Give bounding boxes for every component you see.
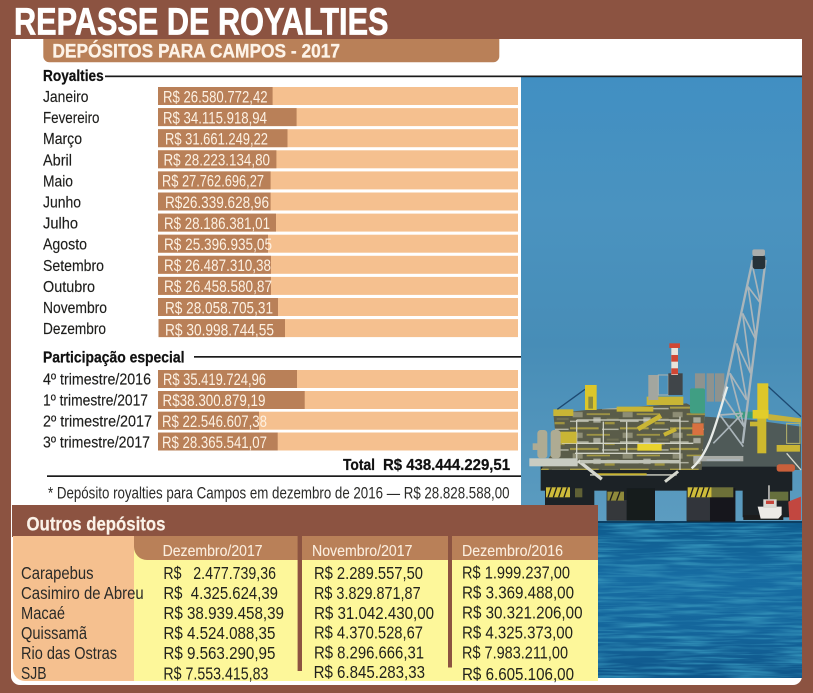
row: 1o trimestre 2017 bbox=[43, 391, 518, 410]
values: dezembro 2017: R$ 4.524.088,35 bbox=[163, 623, 275, 643]
row: maio: R$ 27.762.696,27 bbox=[162, 173, 264, 191]
title: REPASSE DE ROYALTIES bbox=[14, 1, 388, 43]
row: janeiro bbox=[43, 87, 518, 106]
row: 3o trimestre 2017: R$ 28.365.541,07 bbox=[162, 434, 267, 452]
heading: royalties: Royalties bbox=[43, 68, 104, 85]
row: setembro bbox=[43, 256, 518, 275]
row: 1o trimestre 2017: 1º trimestre/2017 bbox=[43, 392, 148, 410]
row: julho: Julho bbox=[43, 216, 78, 233]
row: abril bbox=[43, 150, 518, 170]
values: dezembro 2016: R$ 30.321.206,00 bbox=[462, 603, 583, 623]
row: agosto: Agosto bbox=[43, 237, 87, 254]
row: dezembro bbox=[43, 319, 518, 340]
municipality labels bbox=[21, 563, 144, 683]
total: Total bbox=[343, 457, 375, 474]
row: outubro: Outubro bbox=[43, 279, 95, 296]
row: agosto: R$ 25.396.935,05 bbox=[164, 236, 272, 254]
panel: outros depositos bbox=[12, 505, 598, 684]
column header band bbox=[134, 536, 598, 560]
topside modules bbox=[541, 403, 705, 470]
yellow block bbox=[637, 444, 662, 451]
values: dezembro 2017: R$ 4.325.624,39 bbox=[163, 583, 278, 603]
municipality labels: Quissamã bbox=[21, 623, 87, 643]
hazard stripes bbox=[546, 487, 788, 501]
deck and white braces bbox=[529, 456, 743, 483]
row: 3o trimestre 2017: 3º trimestre/2017 bbox=[43, 434, 150, 452]
values: novembro 2017: R$ 6.845.283,33 bbox=[314, 662, 425, 682]
values: dezembro 2017: R$ 7.553.415,83 bbox=[163, 664, 268, 684]
row: marco: Março bbox=[43, 131, 82, 148]
platform bbox=[529, 249, 801, 522]
crane bbox=[692, 260, 766, 468]
row: dezembro: R$ 30.998.744,55 bbox=[165, 322, 274, 340]
row: julho: R$ 28.186.381,01 bbox=[164, 215, 270, 233]
row: junho: Junho bbox=[43, 194, 81, 212]
row: junho bbox=[43, 192, 518, 212]
values: dezembro 2017: R$ 38.939.458,39 bbox=[163, 603, 284, 623]
row: novembro bbox=[43, 298, 518, 317]
row: janeiro: Janeiro bbox=[43, 89, 89, 106]
values: dezembro 2017: R$ 2.477.739,36 bbox=[163, 563, 276, 583]
row: julho bbox=[43, 214, 518, 233]
row: junho: R$26.339.628,96 bbox=[165, 194, 269, 212]
row: maio bbox=[43, 171, 518, 191]
column headers: Dezembro/2017 bbox=[163, 543, 263, 560]
values: dezembro 2016 bbox=[462, 563, 583, 684]
column dividers bbox=[298, 536, 302, 671]
row: maio: Maio bbox=[43, 173, 73, 190]
column headers: Dezembro/2016 bbox=[462, 543, 563, 560]
left yellow tower bbox=[557, 385, 597, 410]
subtitle bar bbox=[43, 39, 499, 63]
values: dezembro 2016: R$ 6.605.106,00 bbox=[462, 664, 574, 684]
right yellow tower bbox=[753, 383, 801, 472]
municipality labels: Carapebus bbox=[21, 563, 94, 583]
footnote: * Depósito royalties para Campos em dezembro de 2016 — R$ 28.828.588,00 bbox=[48, 484, 510, 502]
row: 4o trimestre 2016: 4º trimestre/2016 bbox=[43, 372, 151, 388]
row: agosto bbox=[43, 235, 518, 254]
values: dezembro 2016: R$ 4.325.373,00 bbox=[462, 623, 573, 643]
values: dezembro 2017 bbox=[163, 563, 284, 684]
row: dezembro: Dezembro bbox=[43, 321, 106, 338]
column headers bbox=[163, 543, 563, 560]
values: dezembro 2016: R$ 7.983.211,00 bbox=[462, 643, 568, 663]
sea bbox=[598, 521, 802, 678]
values: dezembro 2017: R$ 9.563.290,95 bbox=[163, 643, 275, 663]
subtitle bar: DEPÓSITOS PARA CAMPOS - 2017 bbox=[52, 39, 340, 63]
row: 2o trimestre 2017: R$ 22.546.607,38 bbox=[162, 413, 267, 431]
row: marco bbox=[43, 129, 518, 148]
row: novembro: R$ 28.058.705,31 bbox=[165, 299, 273, 317]
values: novembro 2017: R$ 31.042.430,00 bbox=[314, 603, 434, 623]
row: setembro: R$ 26.487.310,38 bbox=[164, 257, 271, 275]
heading: outros depositos: Outros depósitos bbox=[26, 515, 166, 536]
row: 3o trimestre 2017 bbox=[43, 432, 518, 452]
row: fevereiro: R$ 34.115.918,94 bbox=[163, 109, 267, 127]
values: novembro 2017 bbox=[314, 563, 434, 682]
stacks bbox=[695, 373, 724, 402]
crane head bbox=[753, 255, 765, 269]
values background bbox=[134, 536, 598, 681]
values: novembro 2017: R$ 2.289.557,50 bbox=[314, 563, 423, 583]
photo: offshore oil platform bbox=[521, 77, 802, 678]
row: fevereiro: Fevereiro bbox=[43, 110, 100, 127]
row: 2o trimestre 2017: 2º trimestre/2017 bbox=[43, 414, 152, 430]
row: outubro: R$ 26.458.580,87 bbox=[164, 278, 272, 296]
green tank bbox=[690, 388, 705, 413]
row: abril: Abril bbox=[43, 152, 72, 169]
section: royalties bbox=[43, 68, 802, 340]
municipality labels: SJB bbox=[21, 663, 46, 683]
legs and underside bbox=[541, 467, 792, 522]
row: abril: R$ 28.223.134,80 bbox=[164, 152, 270, 170]
row: 1o trimestre 2017: R$38.300.879,19 bbox=[162, 392, 266, 410]
row: fevereiro bbox=[43, 108, 518, 127]
row: outubro bbox=[43, 277, 518, 296]
flare tower bbox=[648, 343, 683, 400]
values: dezembro 2016: R$ 1.999.237,00 bbox=[462, 563, 570, 583]
row: janeiro: R$ 26.580.772,42 bbox=[163, 88, 268, 106]
row: 2o trimestre 2017 bbox=[43, 412, 518, 431]
tugboat bbox=[743, 485, 783, 520]
orange box bbox=[692, 423, 704, 435]
row: setembro: Setembro bbox=[43, 258, 104, 275]
heading: participacao especial: Participação especial bbox=[43, 350, 184, 366]
row: novembro: Novembro bbox=[43, 300, 107, 317]
municipality labels: Rio das Ostras bbox=[21, 643, 117, 663]
total: R$ 438.444.229,51 bbox=[383, 457, 510, 474]
values: dezembro 2016: R$ 3.369.488,00 bbox=[462, 583, 574, 603]
row: 4o trimestre 2016 bbox=[43, 370, 518, 389]
column headers: Novembro/2017 bbox=[312, 543, 413, 560]
values: novembro 2017: R$ 8.296.666,31 bbox=[314, 643, 424, 663]
municipality labels: Casimiro de Abreu bbox=[21, 583, 144, 603]
red ship bbox=[788, 497, 801, 520]
label column bbox=[13, 536, 135, 681]
row: marco: R$ 31.661.249,22 bbox=[165, 130, 268, 148]
right side backdrop bbox=[700, 417, 801, 470]
section: participacao especial bbox=[43, 350, 521, 452]
values: novembro 2017: R$ 3.829.871,87 bbox=[314, 583, 421, 603]
cylinders bbox=[533, 430, 561, 458]
municipality labels: Macaé bbox=[21, 603, 65, 623]
row: 4o trimestre 2016: R$ 35.419.724,96 bbox=[163, 371, 266, 389]
values: novembro 2017: R$ 4.370.528,67 bbox=[314, 623, 423, 643]
